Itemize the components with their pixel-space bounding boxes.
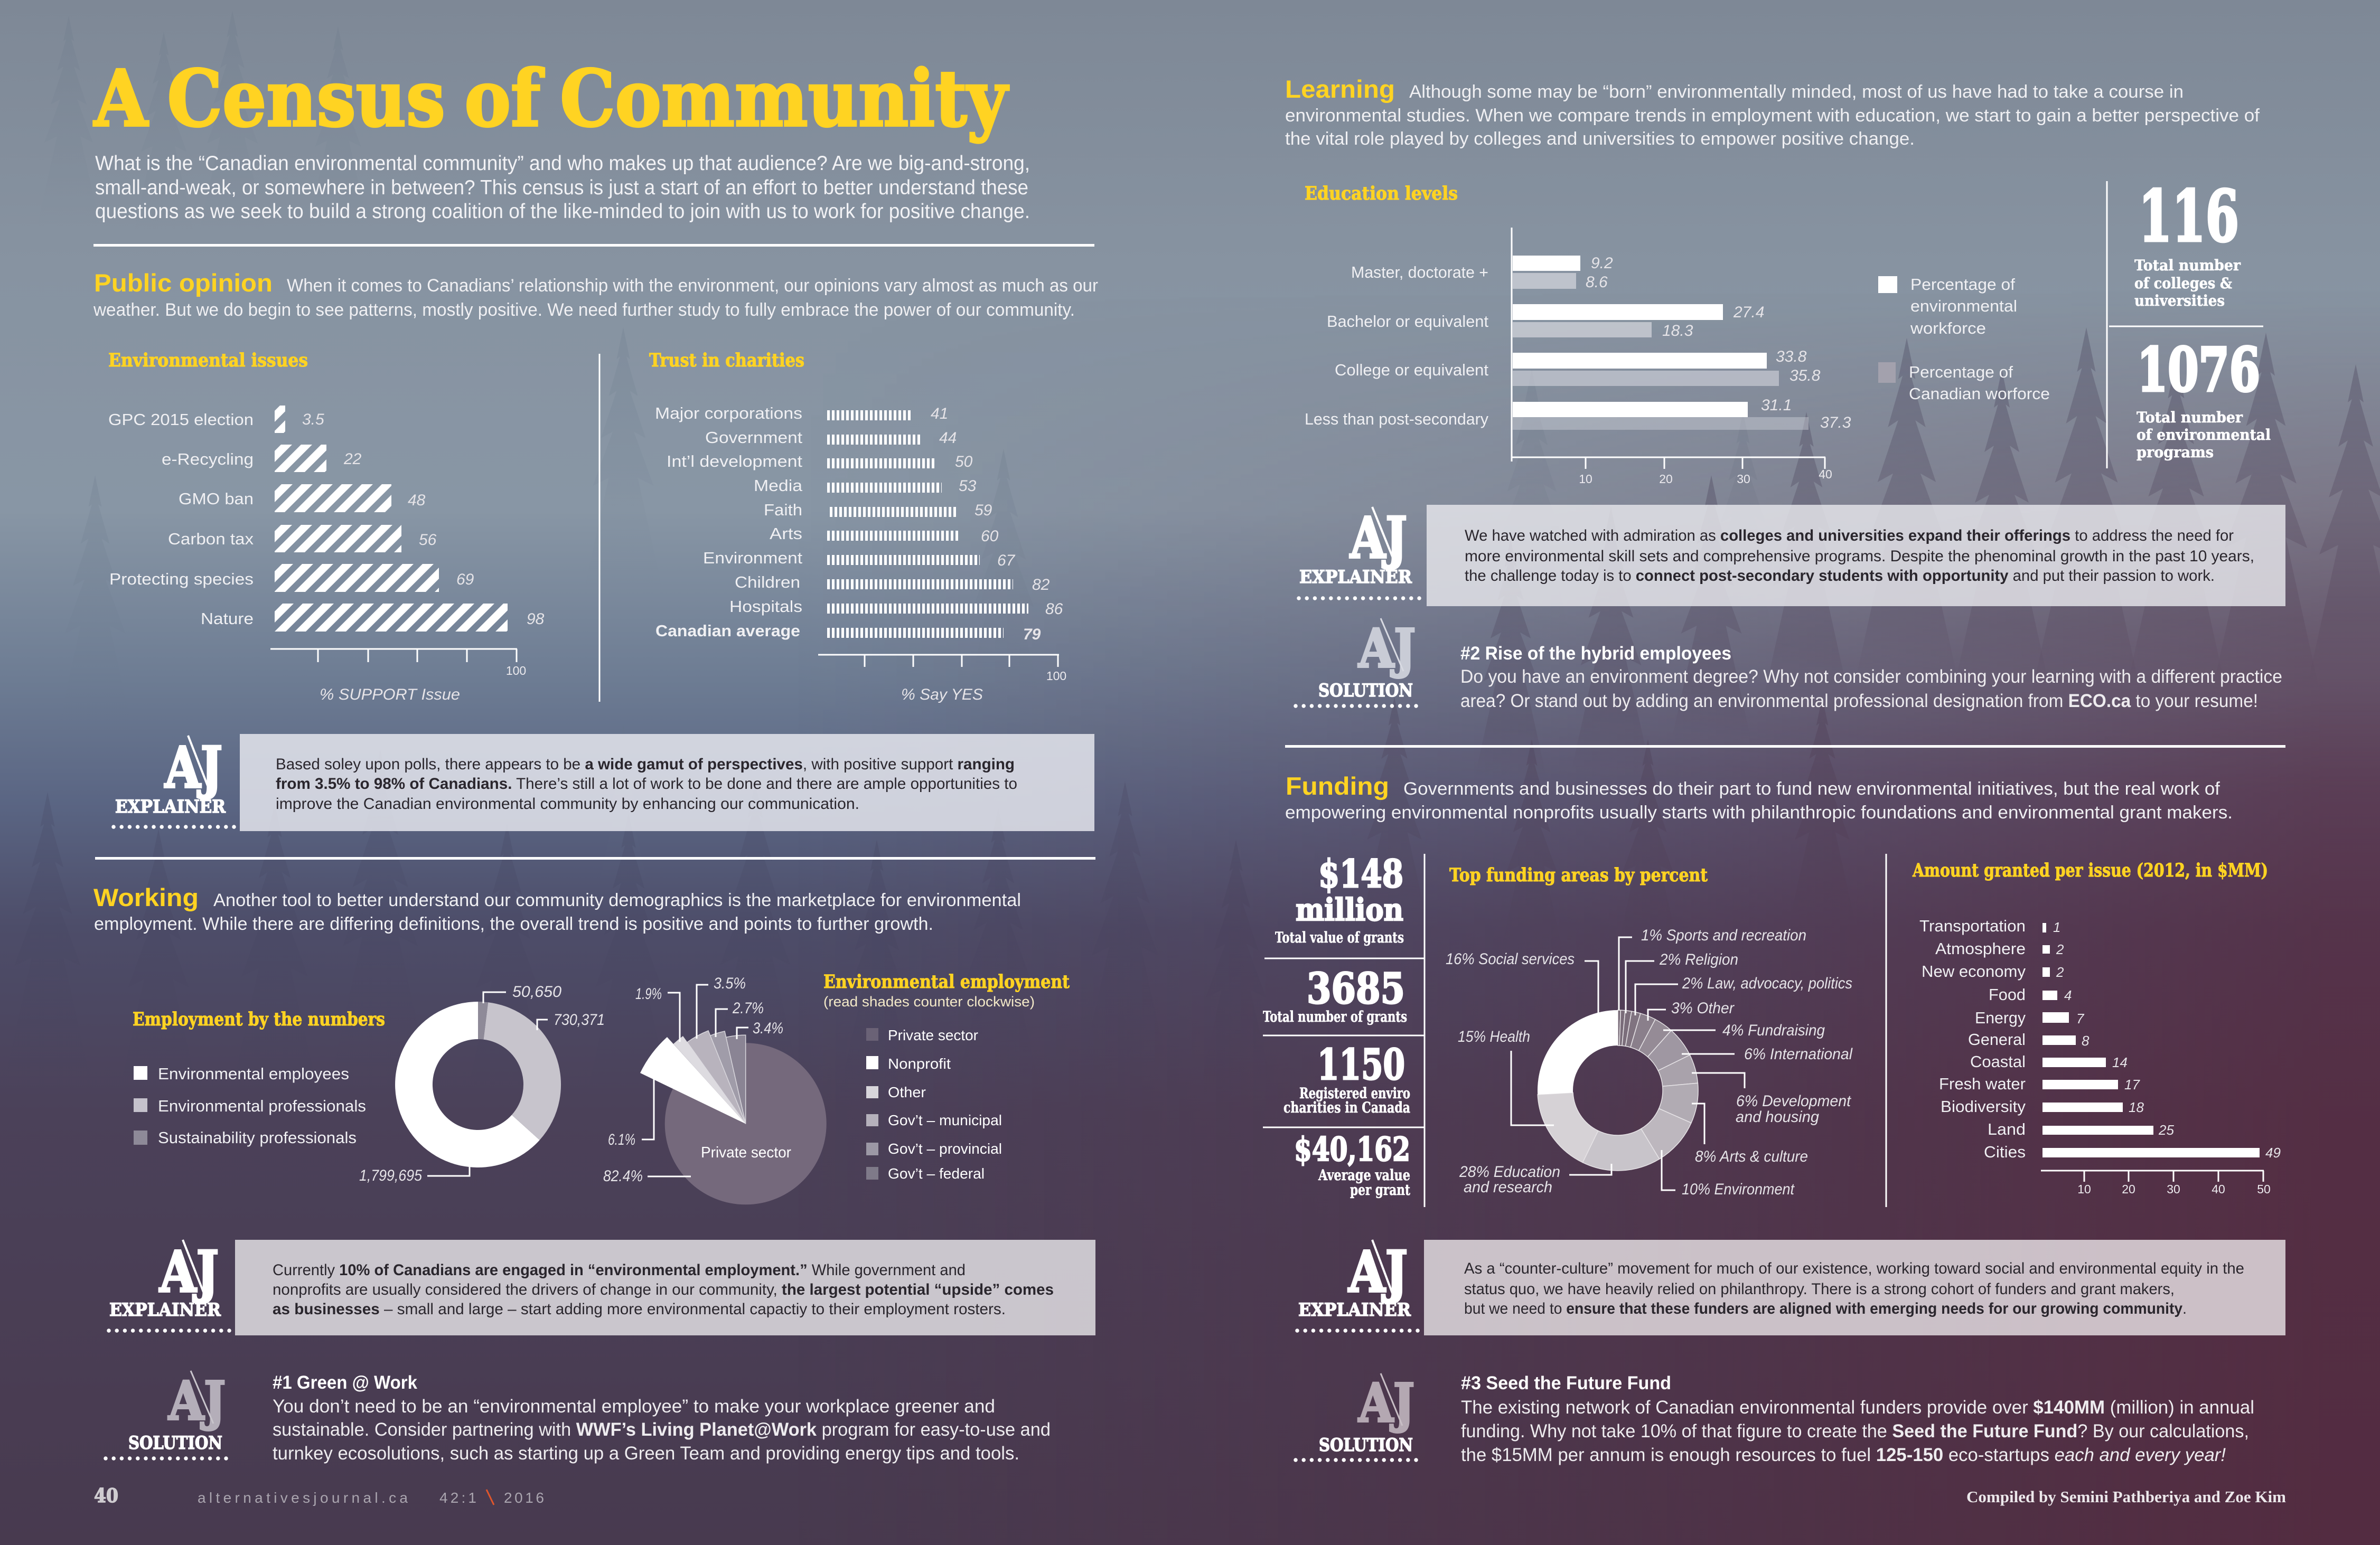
credit line: Compiled by Semini Pathberiya and Zoe Kim bbox=[1966, 1487, 2286, 1506]
chart: environmental issues: 98 bbox=[527, 610, 545, 628]
legend: education levels: workforce bbox=[1910, 319, 1986, 337]
donut chart: top funding areas: 4% Fundraising bbox=[1722, 1022, 1825, 1039]
explainer badge: learning: AJ bbox=[1350, 505, 1407, 571]
donut chart: top funding areas: 2% Religion bbox=[1659, 951, 1738, 968]
solution text: green at work: sustainable. Consider partnering with WWF’s Living Planet@Work program for easy-to-use and bbox=[273, 1419, 1051, 1440]
chart: amount granted per issue: 2 bbox=[2056, 964, 2064, 980]
heading: funding: empowering environmental nonprofits usually starts with philanthropic foundations and environmental grant makers. bbox=[1285, 803, 2233, 823]
chart: amount granted per issue: Amount granted per issue (2012, in $MM) bbox=[1912, 860, 2268, 881]
explainer panel: funding: but we need to ensure that these funders are aligned with emerging needs for our growing community. bbox=[1464, 1300, 2187, 1317]
chart: trust in charities: 67 bbox=[997, 552, 1016, 569]
heading: funding: Funding bbox=[1286, 772, 1389, 800]
heading: learning: the vital role played by colleges and universities to empower positive change. bbox=[1285, 129, 1915, 149]
chart: trust in charities: 100 bbox=[1046, 669, 1066, 683]
donut chart: top funding areas: 6% Development bbox=[1736, 1092, 1852, 1110]
stats column: funding: Average value bbox=[1318, 1166, 1410, 1184]
chart: amount granted per issue: Atmosphere bbox=[1935, 939, 2026, 958]
chart: trust in charities: Media bbox=[754, 476, 803, 495]
stats: colleges and programs bbox=[2107, 175, 2271, 468]
pie chart: environmental employment bbox=[603, 975, 827, 1204]
heading: funding bbox=[1285, 772, 2233, 823]
solution badge: hybrid employees: AJ bbox=[1358, 617, 1416, 680]
chart: trust in charities: Arts bbox=[770, 524, 802, 543]
explainer badge: working: AJ bbox=[159, 1239, 219, 1305]
chart: amount granted per issue: 20 bbox=[2122, 1182, 2135, 1196]
legend: education levels: Percentage of bbox=[1910, 275, 2015, 294]
stats: colleges and programs: Total number bbox=[2134, 257, 2241, 274]
stats: colleges and programs: 1076 bbox=[2137, 335, 2260, 405]
explainer panel: funding: status quo, we have heavily relied on philanthropy. There is a strong cohort of funders and grant makers, bbox=[1464, 1280, 2175, 1298]
explainer badge: public opinion: AJ bbox=[164, 735, 222, 801]
legend: environmental employment: Gov’t – municipal bbox=[888, 1112, 1002, 1128]
stats column: funding: per grant bbox=[1350, 1181, 1410, 1199]
stats column: funding: Registered enviro bbox=[1299, 1085, 1410, 1102]
intro text block bbox=[95, 152, 1030, 223]
stats column: funding: charities in Canada bbox=[1283, 1099, 1410, 1116]
donut chart: top funding areas bbox=[1446, 864, 1853, 1198]
chart: education levels: 9.2 bbox=[1591, 255, 1613, 272]
solution text: green at work bbox=[273, 1372, 1051, 1464]
chart: education levels: 18.3 bbox=[1662, 322, 1693, 340]
chart: environmental issues: 69 bbox=[456, 571, 474, 588]
chart: education levels: Less than post-secondary bbox=[1305, 410, 1488, 428]
solution badge: hybrid employees: SOLUTION bbox=[1318, 680, 1413, 701]
explainer panel: learning: We have watched with admiration as colleges and universities expand their offerings to address the need for bbox=[1465, 527, 2234, 544]
pie chart: environmental employment: 3.4% bbox=[753, 1020, 783, 1037]
solution text: green at work: #1 Green @ Work bbox=[273, 1372, 417, 1393]
chart: amount granted per issue: Transportation bbox=[1919, 917, 2026, 935]
chart: amount granted per issue: 10 bbox=[2077, 1182, 2091, 1196]
chart: trust in charities: 86 bbox=[1045, 600, 1063, 618]
heading: working: Working bbox=[93, 883, 199, 911]
chart: amount granted per issue: 1 bbox=[2053, 919, 2060, 935]
donut chart: top funding areas: and research bbox=[1464, 1179, 1552, 1196]
pie chart: environmental employment: 1.9% bbox=[635, 985, 662, 1003]
chart: trust in charities: 44 bbox=[939, 429, 957, 447]
solution text: seed the future fund: #3 Seed the Future Fund bbox=[1461, 1373, 1671, 1393]
chart: amount granted per issue: 17 bbox=[2124, 1077, 2140, 1092]
chart: education levels: Bachelor or equivalent bbox=[1327, 312, 1488, 331]
chart: environmental issues: Protecting species bbox=[109, 570, 254, 588]
solution text: hybrid employees: Do you have an environment degree? Why not consider combining your learning with a different practice bbox=[1460, 666, 2282, 687]
solution text: seed the future fund: the $15MM per annum is enough resources to fuel 125-150 eco-startups each and every year! bbox=[1461, 1445, 2226, 1465]
solution text: seed the future fund bbox=[1461, 1373, 2254, 1465]
chart: trust in charities: % Say YES bbox=[901, 686, 983, 703]
solution badge: hybrid employees bbox=[1296, 617, 1422, 706]
chart: environmental issues: 100 bbox=[506, 664, 526, 677]
donut chart: top funding areas: 15% Health bbox=[1458, 1028, 1530, 1045]
chart: education levels: 37.3 bbox=[1820, 414, 1851, 431]
explainer badge: funding bbox=[1297, 1239, 1420, 1331]
chart: trust in charities: 41 bbox=[931, 405, 948, 422]
explainer panel: public opinion bbox=[240, 734, 1094, 831]
footer: page info: 40 bbox=[94, 1485, 118, 1507]
chart: education levels: College or equivalent bbox=[1335, 361, 1488, 379]
donut chart: top funding areas: 28% Education bbox=[1459, 1163, 1560, 1181]
stats column: funding bbox=[1263, 851, 1425, 1207]
explainer panel: public opinion: Based soley upon polls, there appears to be a wide gamut of perspectives, with positive support ranging bbox=[276, 756, 1015, 773]
chart: education levels: 27.4 bbox=[1733, 304, 1764, 321]
explainer badge: public opinion: EXPLAINER bbox=[115, 796, 226, 817]
chart: education levels: 8.6 bbox=[1586, 274, 1608, 291]
legend: education levels: Canadian worforce bbox=[1909, 384, 2050, 403]
explainer panel: working: as businesses – small and large – start adding more environmental capactiy to their employment rosters. bbox=[273, 1301, 1006, 1318]
solution badge: seed the future fund: SOLUTION bbox=[1319, 1435, 1413, 1456]
chart: trust in charities: Government bbox=[705, 428, 802, 447]
explainer panel: learning bbox=[1427, 505, 2285, 606]
heading: working bbox=[93, 883, 1021, 934]
heading: learning: Although some may be “born” environmentally minded, most of us have had to take a course in bbox=[1409, 82, 2184, 102]
heading: public opinion: weather. But we do begin to see patterns, mostly positive. We need further study to fully embrace the power of our community. bbox=[93, 300, 1075, 320]
heading: learning: Learning bbox=[1285, 75, 1395, 103]
chart: amount granted per issue: 25 bbox=[2158, 1122, 2174, 1138]
chart: amount granted per issue: Biodiversity bbox=[1941, 1097, 2026, 1116]
chart: trust in charities: 60 bbox=[981, 527, 999, 545]
chart: education levels: 35.8 bbox=[1789, 367, 1821, 384]
chart: trust in charities: 53 bbox=[959, 477, 977, 495]
chart: education levels: Education levels bbox=[1305, 183, 1458, 204]
chart: education levels: 30 bbox=[1737, 472, 1750, 486]
heading: learning bbox=[1285, 75, 2260, 149]
donut chart: top funding areas: and housing bbox=[1736, 1108, 1819, 1126]
donut chart: employment: 50,650 bbox=[512, 983, 561, 1001]
chart: environmental issues: 48 bbox=[408, 492, 426, 509]
chart: amount granted per issue: Energy bbox=[1975, 1009, 2026, 1027]
solution text: green at work: You don’t need to be an “environmental employee” to make your workplace greener and bbox=[273, 1396, 995, 1417]
intro text block: questions as we seek to build a strong coalition of the like-minded to join with us to work for positive change. bbox=[95, 200, 1030, 223]
chart: trust in charities: Environment bbox=[703, 549, 802, 567]
solution text: seed the future fund: The existing network of Canadian environmental funders provide over $140MM (million) in annual bbox=[1461, 1397, 2254, 1418]
heading: learning: environmental studies. When we compare trends in employment with education, we start to gain a better perspective of bbox=[1285, 106, 2260, 126]
donut chart: top funding areas: 8% Arts & culture bbox=[1695, 1148, 1808, 1165]
donut chart: employment: 1,799,695 bbox=[359, 1167, 422, 1184]
chart: amount granted per issue bbox=[1912, 860, 2281, 1196]
explainer panel: public opinion: improve the Canadian environmental community by enhancing our communication. bbox=[276, 795, 859, 813]
stats: colleges and programs: universities bbox=[2134, 292, 2225, 309]
explainer panel: funding bbox=[1424, 1240, 2285, 1335]
explainer panel: funding: As a “counter-culture” movement for much of our existence, working toward social and environmental equity in the bbox=[1464, 1260, 2244, 1277]
chart: education levels: 40 bbox=[1819, 467, 1832, 481]
chart: education levels: 20 bbox=[1659, 472, 1673, 486]
donut chart: top funding areas: 16% Social services bbox=[1446, 950, 1575, 968]
chart: amount granted per issue: 2 bbox=[2056, 941, 2064, 957]
stats column: funding: Total number of grants bbox=[1263, 1008, 1407, 1025]
stats: colleges and programs: Total number bbox=[2137, 409, 2243, 426]
legend: environmental employment: Private sector bbox=[888, 1027, 978, 1043]
chart: amount granted per issue: 18 bbox=[2129, 1099, 2144, 1115]
explainer badge: working: EXPLAINER bbox=[109, 1299, 221, 1321]
explainer panel: learning: more environmental skill sets and comprehensive programs. Despite the phenominal growth in the past 10 years, bbox=[1465, 548, 2254, 565]
footer: page info: alternativesjournal.ca bbox=[198, 1490, 408, 1506]
chart: amount granted per issue: 14 bbox=[2112, 1054, 2128, 1070]
explainer badge: learning: EXPLAINER bbox=[1299, 567, 1412, 588]
solution badge: seed the future fund: AJ bbox=[1358, 1372, 1414, 1434]
stats column: funding: Total value of grants bbox=[1275, 929, 1404, 946]
donut chart: top funding areas: 6% International bbox=[1744, 1045, 1853, 1063]
donut chart: employment: 730,371 bbox=[554, 1011, 605, 1029]
legend: employment by the numbers: Sustainability professionals bbox=[158, 1128, 357, 1147]
chart: amount granted per issue: New economy bbox=[1922, 962, 2026, 981]
explainer panel: public opinion: from 3.5% to 98% of Canadians. There’s still a lot of work to be done and there are ample opportunities to bbox=[276, 775, 1017, 793]
solution text: green at work: turnkey ecosolutions, such as starting up a Green Team and providing energy tips and tools. bbox=[273, 1443, 1019, 1464]
chart: amount granted per issue: 49 bbox=[2265, 1145, 2281, 1161]
chart: environmental issues: 3.5 bbox=[302, 411, 324, 428]
donut chart: top funding areas: 10% Environment bbox=[1682, 1181, 1795, 1198]
chart: trust in charities: Major corporations bbox=[655, 404, 802, 422]
solution badge: green at work bbox=[106, 1370, 232, 1458]
chart: trust in charities: 82 bbox=[1032, 576, 1050, 593]
legend: employment by the numbers: Environmental professionals bbox=[158, 1097, 366, 1115]
footer: page info bbox=[94, 1485, 544, 1507]
solution text: hybrid employees: #2 Rise of the hybrid employees bbox=[1460, 643, 1731, 664]
chart: trust in charities: Children bbox=[735, 573, 800, 591]
stats column: funding: 3685 bbox=[1307, 964, 1405, 1013]
chart: education levels: 10 bbox=[1579, 472, 1592, 486]
footer: page info: 2016 bbox=[504, 1490, 544, 1506]
stats column: funding: million bbox=[1296, 892, 1403, 928]
chart: trust in charities: 50 bbox=[955, 453, 973, 470]
donut chart: top funding areas: 2% Law, advocacy, politics bbox=[1682, 975, 1852, 992]
explainer panel: working bbox=[235, 1240, 1095, 1335]
heading: public opinion bbox=[93, 269, 1098, 320]
legend: environmental employment bbox=[823, 971, 1070, 1182]
legend: education levels: environmental bbox=[1910, 297, 2017, 315]
explainer panel: working: Currently 10% of Canadians are engaged in “environmental employment.” While government and bbox=[273, 1261, 966, 1279]
legend: environmental employment: Nonprofit bbox=[888, 1056, 951, 1072]
donut chart: top funding areas: 1% Sports and recreation bbox=[1641, 927, 1806, 944]
donut chart: top funding areas: Top funding areas by percent bbox=[1449, 864, 1708, 886]
chart: amount granted per issue: Fresh water bbox=[1939, 1075, 2026, 1093]
heading: public opinion: When it comes to Canadians’ relationship with the environment, our opinions vary almost as much as our bbox=[287, 276, 1098, 296]
stats: colleges and programs: 116 bbox=[2139, 175, 2239, 258]
legend: environmental employment: Gov’t – federal bbox=[888, 1165, 985, 1182]
chart: environmental issues: % SUPPORT Issue bbox=[320, 686, 460, 703]
pie chart: environmental employment: Private sector bbox=[701, 1144, 791, 1161]
footer: page info: 42:1 bbox=[439, 1490, 476, 1506]
legend: environmental employment: Gov’t – provincial bbox=[888, 1141, 1002, 1157]
legend: employment by the numbers: Employment by the numbers bbox=[133, 1009, 385, 1030]
chart: environmental issues: 22 bbox=[343, 450, 362, 468]
explainer badge: working bbox=[109, 1239, 231, 1331]
heading: working: Another tool to better understand our community demographics is the marketplace for environmental bbox=[213, 890, 1021, 910]
chart: trust in charities: 59 bbox=[975, 502, 992, 519]
heading: funding: Governments and businesses do their part to fund new environmental initiatives, but the real work of bbox=[1403, 779, 2220, 799]
chart: amount granted per issue: 7 bbox=[2076, 1011, 2085, 1026]
chart: environmental issues: Nature bbox=[201, 609, 254, 628]
chart: environmental issues bbox=[108, 350, 545, 703]
explainer badge: learning bbox=[1299, 505, 1421, 598]
solution badge: green at work: SOLUTION bbox=[128, 1433, 222, 1454]
legend: employment by the numbers bbox=[133, 1009, 385, 1147]
stats: colleges and programs: of environmental bbox=[2137, 426, 2271, 444]
solution badge: green at work: AJ bbox=[168, 1370, 226, 1432]
title: A Census of Community bbox=[93, 53, 1009, 144]
explainer badge: funding: AJ bbox=[1348, 1239, 1408, 1305]
legend: environmental employment: Other bbox=[888, 1084, 926, 1100]
chart: environmental issues: GMO ban bbox=[179, 489, 254, 508]
intro text block: What is the “Canadian environmental community” and who makes up that audience? Are we big-and-strong, bbox=[95, 152, 1030, 175]
stats: colleges and programs: programs bbox=[2137, 444, 2214, 461]
explainer badge: funding: EXPLAINER bbox=[1298, 1299, 1411, 1321]
chart: environmental issues: Environmental issues bbox=[108, 350, 308, 371]
chart: trust in charities: Trust in charities bbox=[649, 350, 804, 371]
chart: trust in charities: Hospitals bbox=[729, 597, 802, 616]
chart: amount granted per issue: Land bbox=[1988, 1120, 2026, 1138]
chart: trust in charities: Faith bbox=[764, 501, 802, 519]
legend: environmental employment: (read shades counter clockwise) bbox=[823, 994, 1035, 1010]
chart: education levels: Master, doctorate + bbox=[1351, 263, 1488, 281]
chart: amount granted per issue: 8 bbox=[2082, 1033, 2089, 1049]
chart: education levels: 33.8 bbox=[1776, 348, 1807, 365]
chart: trust in charities: 79 bbox=[1023, 626, 1041, 643]
chart: amount granted per issue: Food bbox=[1989, 985, 2026, 1004]
intro text block: small-and-weak, or somewhere in between? This census is just a start of an effort to better understand these bbox=[95, 176, 1028, 199]
chart: trust in charities: Int’l development bbox=[667, 452, 802, 470]
chart: education levels bbox=[1305, 183, 1851, 486]
pie chart: environmental employment: 2.7% bbox=[732, 1000, 764, 1017]
chart: amount granted per issue: 30 bbox=[2167, 1182, 2180, 1196]
explainer panel: learning: the challenge today is to connect post-secondary students with opportunity and put their passion to work. bbox=[1465, 567, 2215, 585]
legend: education levels bbox=[1878, 275, 2050, 403]
donut chart: top funding areas: 3% Other bbox=[1671, 1000, 1735, 1017]
chart: environmental issues: Carbon tax bbox=[168, 530, 254, 548]
stats column: funding: $40,162 bbox=[1294, 1130, 1410, 1169]
chart: environmental issues: e-Recycling bbox=[162, 450, 254, 468]
solution text: hybrid employees: area? Or stand out by adding an environmental professional designation from ECO.ca to your resume! bbox=[1460, 691, 2258, 711]
solution text: seed the future fund: funding. Why not take 10% of that figure to create the Seed the Future Fund? By our calculations, bbox=[1461, 1421, 2249, 1442]
chart: amount granted per issue: 40 bbox=[2212, 1182, 2225, 1196]
stats: colleges and programs: of colleges & bbox=[2134, 275, 2232, 292]
chart: amount granted per issue: 4 bbox=[2064, 987, 2072, 1003]
stats column: funding: $148 bbox=[1318, 851, 1403, 896]
chart: trust in charities: Canadian average bbox=[655, 621, 800, 640]
legend: employment by the numbers: Environmental employees bbox=[158, 1064, 349, 1083]
stats column: funding: 1150 bbox=[1317, 1040, 1405, 1089]
chart: environmental issues: 56 bbox=[419, 531, 437, 549]
legend: education levels: Percentage of bbox=[1909, 363, 2013, 381]
solution text: hybrid employees bbox=[1460, 643, 2282, 711]
explainer badge: public opinion bbox=[114, 735, 236, 827]
chart: trust in charities bbox=[649, 350, 1066, 703]
chart: amount granted per issue: Coastal bbox=[1970, 1052, 2026, 1071]
chart: amount granted per issue: Cities bbox=[1984, 1143, 2026, 1161]
heading: public opinion: Public opinion bbox=[94, 269, 273, 297]
chart: amount granted per issue: General bbox=[1968, 1030, 2026, 1049]
heading: working: employment. While there are differing definitions, the overall trend is positive and points to further growth. bbox=[94, 914, 933, 934]
pie chart: environmental employment: 82.4% bbox=[603, 1167, 643, 1185]
explainer panel: working: nonprofits are usually considered the drivers of change in our community, the largest potential “upside” comes bbox=[273, 1281, 1054, 1298]
pie chart: environmental employment: 3.5% bbox=[714, 975, 746, 992]
chart: environmental issues: GPC 2015 election bbox=[108, 410, 254, 429]
donut chart: employment bbox=[359, 983, 605, 1184]
chart: education levels: 31.1 bbox=[1761, 397, 1792, 414]
legend: environmental employment: Environmental employment bbox=[823, 971, 1070, 993]
solution badge: seed the future fund bbox=[1296, 1372, 1422, 1460]
pie chart: environmental employment: 6.1% bbox=[608, 1131, 635, 1148]
chart: amount granted per issue: 50 bbox=[2257, 1182, 2271, 1196]
